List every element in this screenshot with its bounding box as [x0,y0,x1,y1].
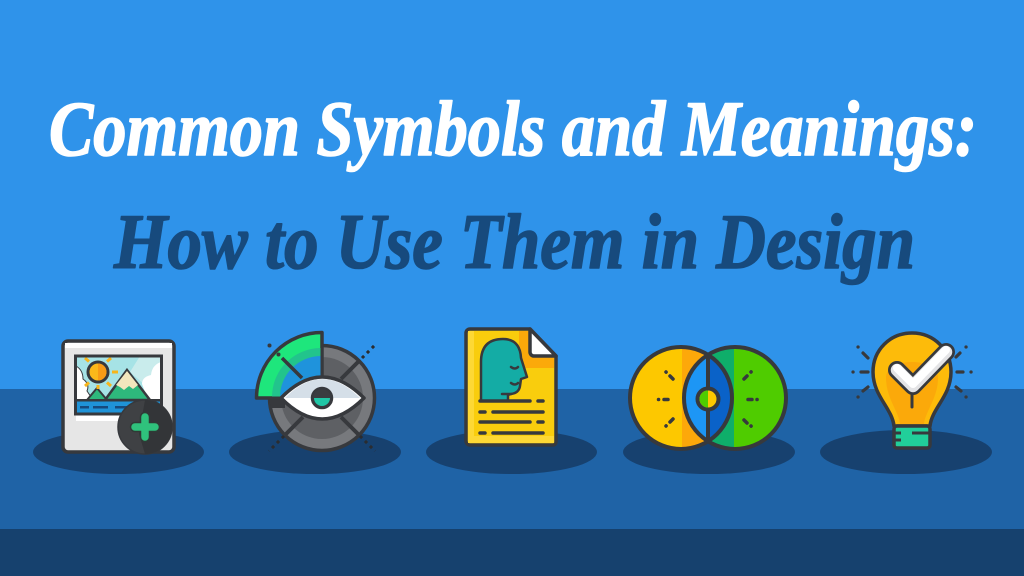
plus badge [118,400,172,454]
left circle [630,347,732,449]
title: line two: How to Use Them in Design [113,198,915,285]
icon: eye with radar dial [229,332,401,474]
icon: light bulb with check mark [820,333,992,474]
bulb [873,333,951,426]
picture scene [75,356,162,414]
dashes [658,372,757,426]
overlap lens [630,347,786,449]
green sector [256,332,322,398]
bulb base [894,426,930,448]
eye [281,377,364,419]
text lines [480,401,543,433]
rays [853,347,971,397]
icon: picture with plus badge [33,341,204,474]
icon: document with portrait [426,329,597,474]
right circle [684,347,786,449]
dial [269,345,375,451]
check mark [897,350,946,386]
icon: venn diagram [623,347,795,474]
portrait head [481,339,527,401]
